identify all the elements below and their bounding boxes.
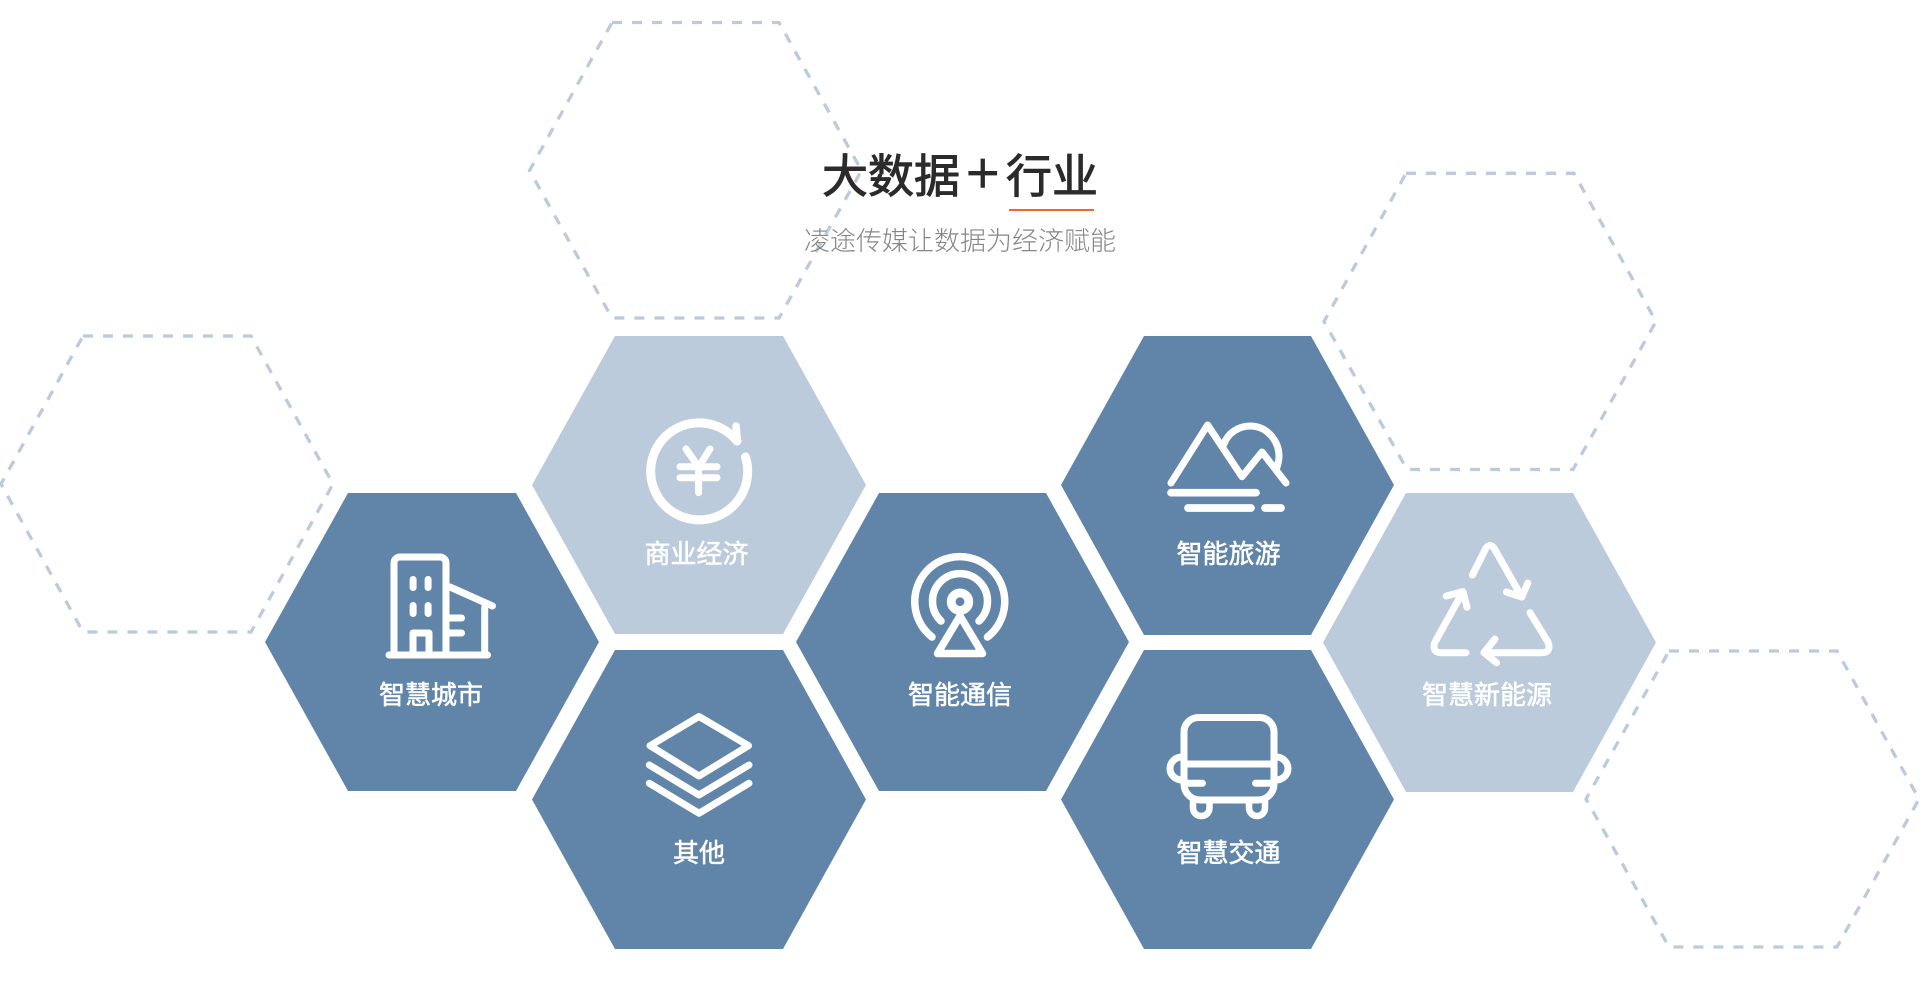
label: 智慧城市 bbox=[379, 680, 483, 710]
dashed hexagon: top bbox=[530, 22, 862, 318]
title: 行业 bbox=[1006, 150, 1098, 202]
dashed hexagon: bottom right bbox=[1586, 651, 1919, 947]
icon: recycle arrows bbox=[1434, 546, 1549, 663]
hexagon background bbox=[1061, 336, 1394, 635]
hexagon background bbox=[1061, 650, 1394, 949]
label: 其他 bbox=[673, 838, 725, 868]
dashed hexagon: left bbox=[1, 336, 333, 632]
hexagon background bbox=[796, 493, 1129, 791]
icon: mountains and sun bbox=[1171, 425, 1286, 508]
label: 智能通信 bbox=[908, 680, 1012, 710]
title underline bbox=[1009, 209, 1094, 211]
subtitle: 凌途传媒让数据为经济赋能 bbox=[804, 226, 1116, 256]
title bbox=[822, 150, 1098, 202]
icon: building bbox=[389, 557, 492, 655]
panel: 智慧新能源 bbox=[1323, 493, 1656, 792]
label: 智慧新能源 bbox=[1422, 680, 1552, 710]
dashed hexagon: top right bbox=[1324, 173, 1656, 470]
panel: 智慧城市 bbox=[265, 493, 599, 791]
icon: yen cycle bbox=[651, 423, 748, 520]
hexagon background bbox=[265, 493, 599, 791]
label: 智能旅游 bbox=[1176, 539, 1281, 569]
panel: 智能通信 bbox=[796, 493, 1129, 791]
panel: 商业经济 bbox=[532, 336, 866, 634]
panel: 其他 bbox=[532, 650, 866, 949]
label: 商业经济 bbox=[644, 539, 749, 569]
icon: signal tower bbox=[915, 557, 1005, 654]
title: ＋ bbox=[964, 154, 1001, 195]
panel: 智能旅游 bbox=[1061, 336, 1394, 635]
hexagon background bbox=[532, 650, 866, 949]
panel: 智慧交通 bbox=[1061, 650, 1394, 949]
label: 智慧交通 bbox=[1176, 838, 1281, 868]
title: 大数据 bbox=[822, 150, 960, 202]
hexagon background bbox=[532, 336, 866, 634]
icon: bus bbox=[1170, 718, 1288, 816]
hexagon background bbox=[1323, 493, 1656, 792]
icon: layers bbox=[649, 716, 749, 813]
